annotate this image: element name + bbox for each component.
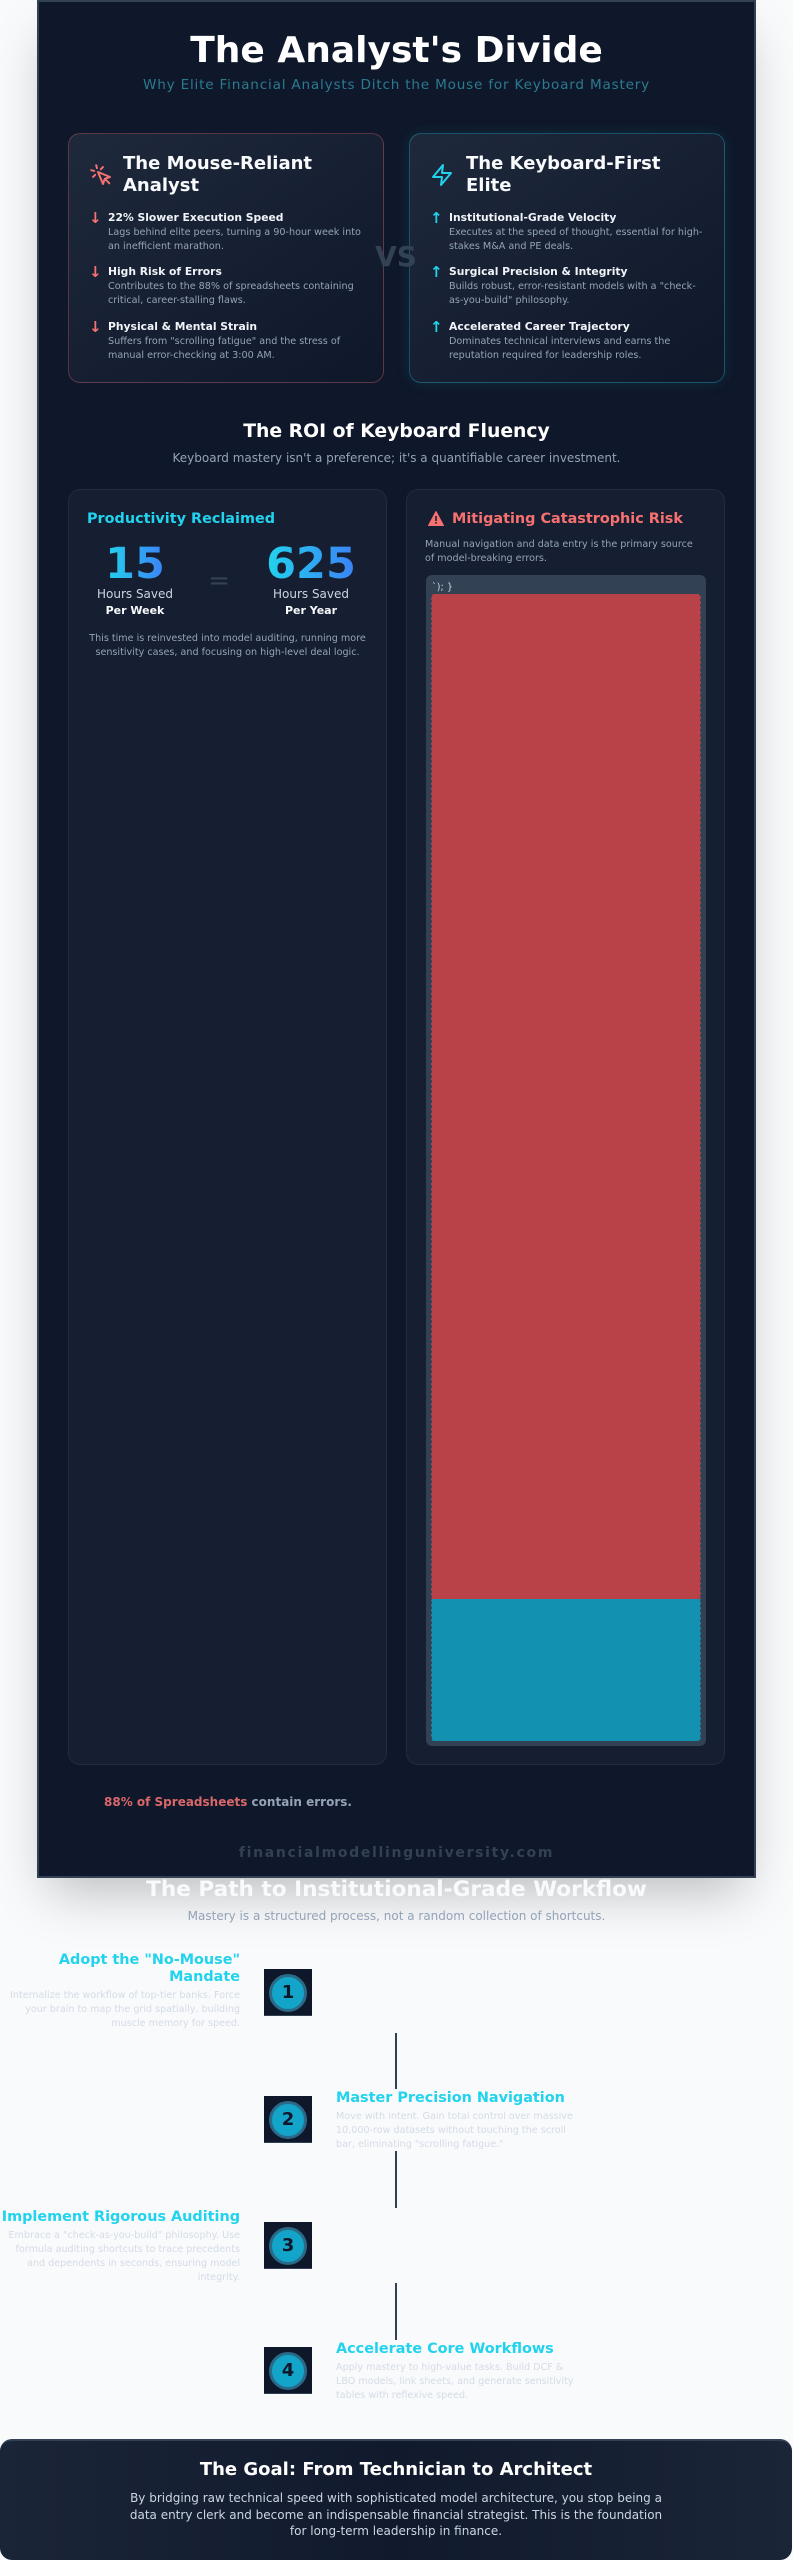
item text [108, 320, 340, 361]
label: Hours Saved [97, 587, 173, 601]
label: Hours Saved [273, 587, 349, 601]
number 3 [269, 2227, 307, 2265]
arrow down: ↓ [89, 209, 102, 227]
item text: Builds robust, error-resistant models with a "check- [449, 281, 696, 292]
step 3 badge [264, 2222, 312, 2269]
step 4 text [336, 2341, 574, 2401]
explanation text: sensitivity cases, and focusing on high-level deal logic. [95, 647, 360, 658]
step 2 text: 10,000-row datasets without touching the scroll [336, 2125, 566, 2136]
item text: High Risk of Errors [108, 265, 222, 278]
VS label: VS [375, 240, 417, 273]
step 2 badge [264, 2096, 312, 2143]
list item: strain [89, 318, 340, 361]
goal text: for long-term leadership in finance. [290, 2524, 502, 2538]
panel: catastrophic risk [406, 489, 725, 1765]
step 4 badge [264, 2347, 312, 2394]
heading: keyboard-first elite: Elite [466, 174, 511, 196]
step 1 badge [264, 1969, 312, 2016]
item text: reputation required for leadership roles. [449, 350, 641, 361]
explanation text [89, 633, 366, 658]
heading: mouse-reliant analyst [123, 153, 312, 196]
heading: ROI: The ROI of Keyboard Fluency [243, 421, 550, 442]
step 3 text [2, 2209, 240, 2283]
number 625: 625 [266, 539, 356, 589]
list item: velocity [430, 209, 702, 252]
step 4 text: Apply mastery to high-value tasks. Build DCF & [336, 2362, 563, 2373]
subheading: path: Mastery is a structured process, not a random collection of shortcuts. [188, 1909, 605, 1923]
explanation text: This time is reinvested into model auditing, running more [89, 633, 366, 644]
step 1 text: your brain to map the grid spatially, building [25, 2004, 240, 2015]
item text: Accelerated Career Trajectory [449, 320, 630, 333]
step 1 text: Internalize the workflow of top-tier banks. Force [10, 1990, 240, 2001]
step 3 text: integrity. [198, 2272, 240, 2283]
arrow down: ↓ [89, 263, 102, 281]
explanation text [425, 539, 693, 564]
panel: the goal [0, 2439, 792, 2560]
item text: Suffers from "scrolling fatigue" and the stress of [108, 336, 340, 347]
connector 2 [395, 2151, 397, 2208]
arrow up: ↑ [430, 263, 443, 281]
heading: mouse-reliant analyst: Analyst [123, 174, 199, 196]
item text: Dominates technical interviews and earns the [449, 336, 670, 347]
item text: manual error-checking at 3:00 AM. [108, 350, 275, 361]
connector 3 [395, 2283, 397, 2340]
heading: productivity: Productivity Reclaimed [87, 511, 275, 527]
step 1 text [10, 1952, 240, 2029]
item text: critical, career-stalling flaws. [108, 295, 246, 306]
item text: as-you-build" philosophy. [449, 295, 569, 306]
step 3 text: formula auditing shortcuts to trace precedents [16, 2244, 240, 2255]
item text: Surgical Precision & Integrity [449, 265, 628, 278]
stat: hours per week [97, 539, 173, 617]
panel: productivity reclaimed [68, 489, 387, 1765]
list item: risk of errors [89, 263, 354, 306]
stat caption: 88% of Spreadsheets contain errors. [104, 1795, 352, 1809]
heading: keyboard-first elite: The Keyboard-First [466, 153, 660, 174]
list item: slower execution [89, 209, 361, 252]
equals sign: = [208, 566, 230, 596]
item text: 22% Slower Execution Speed [108, 211, 283, 224]
item text [108, 211, 361, 252]
item text: Institutional-Grade Velocity [449, 211, 616, 224]
item text [449, 320, 670, 361]
connector 1 [395, 2033, 397, 2089]
icon: lightning bolt [432, 164, 452, 186]
goal text [130, 2491, 662, 2538]
number 1: 1 [282, 1982, 294, 2003]
list item: career [430, 318, 670, 361]
arrow up: ↑ [430, 318, 443, 336]
item text: stakes M&A and PE deals. [449, 241, 573, 252]
item text [449, 265, 696, 306]
step 4 text: LBO models, link sheets, and generate sensitivity [336, 2376, 574, 2387]
teal block [431, 1599, 701, 1741]
step 2 text: bar, eliminating "scrolling fatigue." [336, 2139, 504, 2150]
panel: keyboard-first elite [409, 133, 725, 383]
step 3 text: Embrace a "check-as-you-build" philosophy. Use [8, 2230, 240, 2241]
item text: Contributes to the 88% of spreadsheets containing [108, 281, 354, 292]
step 4 text: Accelerate Core Workflows [336, 2341, 554, 2357]
step 1 text: Mandate [169, 1969, 240, 1985]
item text [449, 211, 702, 252]
subheading: ROI: Keyboard mastery isn't a preference; it's a quantifiable career investment. [172, 451, 620, 465]
footer url: financialmodellinguniversity.com [239, 1845, 554, 1861]
panel: dark main container [37, 0, 756, 1878]
goal heading: The Goal: From Technician to Architect [200, 2459, 592, 2480]
heading: keyboard-first elite [466, 153, 660, 196]
step 3 text: Implement Rigorous Auditing [2, 2209, 240, 2225]
item text: an inefficient marathon. [108, 241, 224, 252]
title: The Analyst's Divide [190, 30, 603, 71]
explanation text: of model-breaking errors. [425, 553, 547, 564]
step 2 text [336, 2090, 573, 2150]
step 2 text: Master Precision Navigation [336, 2090, 565, 2106]
period: Per Year [285, 604, 337, 617]
list item: precision [430, 263, 696, 306]
item text: Executes at the speed of thought, essential for high- [449, 227, 702, 238]
heading: risk: Mitigating Catastrophic Risk [452, 511, 683, 527]
number 2: 2 [282, 2109, 294, 2130]
step 1 text: Adopt the "No-Mouse" [59, 1952, 240, 1968]
goal text: data entry clerk and become an indispensable financial strategist. This is the foundation [130, 2508, 662, 2522]
item text [108, 265, 354, 306]
panel: mouse-reliant analyst [68, 133, 384, 383]
explanation text: Manual navigation and data entry is the primary source [425, 539, 693, 550]
stat: hours per year [266, 539, 356, 617]
item text: Lags behind elite peers, turning a 90-hour week into [108, 227, 361, 238]
number 4 [269, 2352, 307, 2390]
number 1 [269, 1974, 307, 2012]
stray code text: `); } [432, 582, 453, 593]
icon: mouse pointer click [90, 164, 111, 185]
code box chart [426, 575, 706, 1746]
arrow up: ↑ [430, 209, 443, 227]
number 2 [269, 2101, 307, 2139]
step 2 text: Move with intent. Gain total control over massive [336, 2111, 573, 2122]
step 3 text: and dependents in seconds, ensuring model [27, 2258, 240, 2269]
red block [431, 594, 701, 1599]
step 1 text: muscle memory for speed. [111, 2018, 240, 2029]
number 15: 15 [105, 539, 165, 589]
heading: path: The Path to Institutional-Grade Workflow [146, 1877, 647, 1902]
icon: warning triangle [428, 511, 444, 526]
item text: Physical & Mental Strain [108, 320, 257, 333]
period: Per Week [106, 604, 164, 617]
subtitle: Why Elite Financial Analysts Ditch the Mouse for Keyboard Mastery [143, 77, 650, 93]
number 3: 3 [282, 2235, 294, 2256]
arrow down: ↓ [89, 318, 102, 336]
step 4 text: tables with reflexive speed. [336, 2390, 468, 2401]
number 4: 4 [282, 2360, 294, 2381]
goal text: By bridging raw technical speed with sophisticated model architecture, you stop being a [130, 2491, 662, 2505]
heading: mouse-reliant analyst: The Mouse-Reliant [123, 153, 312, 174]
